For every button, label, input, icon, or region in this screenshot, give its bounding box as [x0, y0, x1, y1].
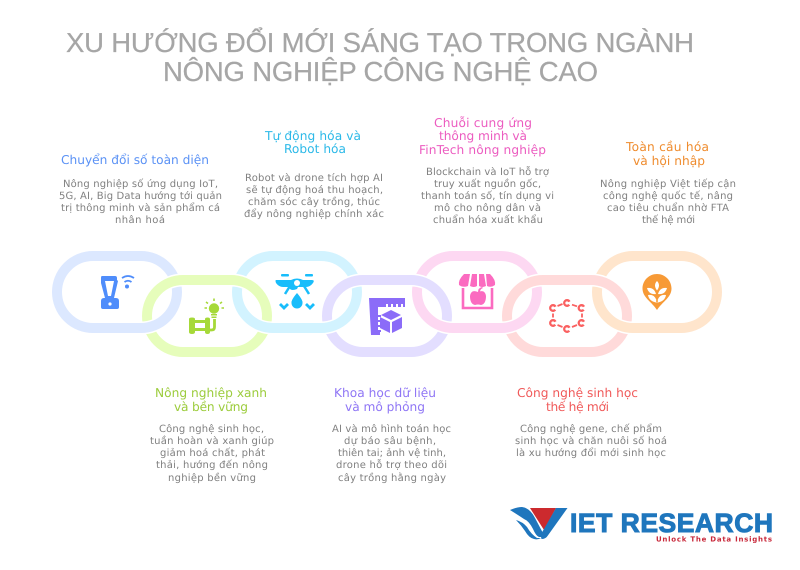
text block: green and sustainable: và bền vững	[174, 400, 248, 414]
text block: smart supply chain and fintech: truy xuất nguồn gốc,	[434, 178, 541, 190]
text block: smart supply chain and fintech: thông minh và	[439, 129, 527, 143]
icon: data cube on ruler	[369, 298, 405, 335]
link 5 pink	[417, 256, 537, 328]
link 1 blue	[57, 256, 177, 328]
icon: plant location pin	[642, 274, 672, 310]
icon: carbon molecule ring	[550, 300, 584, 332]
text block: automation and robotics	[244, 129, 384, 220]
text block: digital transformation	[59, 153, 222, 226]
logo: Viet Research	[510, 507, 773, 544]
text block: next generation biotechnology: là xu hướng đổi mới sinh học	[516, 447, 666, 459]
text block: data science and simulation	[332, 386, 451, 484]
text block: data science and simulation: dự báo sâu bệnh,	[344, 436, 436, 447]
text block: automation and robotics: Robot hóa	[284, 142, 346, 156]
text block: globalisation and integration: Toàn cầu hóa	[625, 140, 709, 154]
text block: globalisation and integration: công nghệ quốc tế, nâng	[603, 190, 733, 202]
text block: globalisation and integration: và hội nhập	[633, 154, 705, 168]
link 6 coral	[507, 280, 627, 352]
text block: smart supply chain and fintech: mô cho nông dân và	[434, 203, 541, 214]
text block: globalisation and integration	[600, 140, 736, 226]
text block: green and sustainable: thải, hướng đến nông	[156, 459, 268, 471]
text block: digital transformation: nhân hoá	[115, 215, 165, 226]
text block: automation and robotics: chăm sóc cây trồng, thúc	[248, 196, 380, 208]
logo: Viet Research: Unlock The Data Insights	[656, 536, 772, 544]
link 4 purple	[327, 280, 447, 352]
text block: digital transformation: 5G, AI, Big Data hướng tới quản	[59, 190, 222, 202]
text block: green and sustainable: giảm hoá chất, phát	[160, 447, 265, 459]
text block: smart supply chain and fintech: Chuỗi cung ứng	[434, 116, 532, 130]
link 2 green	[147, 280, 267, 352]
text block: data science and simulation: thiên tai; ảnh vệ tinh,	[338, 447, 446, 459]
title: XU HƯỚNG ĐỔI MỚI SÁNG TẠO TRONG NGÀNH	[66, 27, 694, 58]
text block: automation and robotics: Robot và drone tích hợp AI	[245, 173, 383, 184]
text block: automation and robotics: Tự động hóa và	[264, 129, 361, 143]
chain of seven interlocking links	[57, 256, 717, 352]
text block: smart supply chain and fintech: Blockchain và IoT hỗ trợ	[426, 166, 550, 178]
icon: agricultural drone spraying	[276, 274, 314, 308]
text block: data science and simulation: Khoa học dữ liệu	[334, 386, 436, 400]
text block: next generation biotechnology: sinh học và chăn nuôi số hoá	[515, 435, 667, 447]
title: NÔNG NGHIỆP CÔNG NGHỆ CAO	[163, 56, 598, 87]
text block: green and sustainable	[150, 386, 274, 484]
text block: next generation biotechnology: Công nghệ gene, chế phẩm	[520, 423, 662, 435]
logo: Viet Research: IET RESEARCH	[570, 508, 773, 538]
text block: green and sustainable: tuần hoàn và xanh giúp	[150, 435, 274, 447]
text block: smart supply chain and fintech: FinTech nông nghiệp	[419, 143, 546, 157]
icon: smart blender with wifi	[101, 276, 134, 309]
link 3 cyan	[237, 256, 357, 328]
text block: smart supply chain and fintech: thanh toán số, tín dụng vi	[421, 190, 554, 202]
text block: next generation biotechnology	[515, 386, 667, 459]
text block: automation and robotics: sẽ tự động hoá thu hoạch,	[246, 185, 383, 196]
icon: fruit shop storefront	[459, 274, 495, 308]
text block: data science and simulation: và mô phỏng	[345, 400, 425, 414]
text block: digital transformation: Nông nghiệp số ứng dụng IoT,	[63, 178, 218, 190]
text block: globalisation and integration: cao tiêu chuẩn nhờ FTA	[607, 202, 729, 214]
text block: smart supply chain and fintech: chuẩn hóa xuất khẩu	[433, 214, 543, 226]
icon: irrigation pipe with light bulb	[189, 298, 224, 334]
text block: data science and simulation: cây trồng hằng ngày	[338, 472, 446, 484]
link 7 orange	[597, 256, 717, 328]
text block: data science and simulation: drone hỗ trợ theo dõi	[336, 459, 447, 471]
text block: globalisation and integration: thế hệ mới	[642, 214, 695, 226]
text block: data science and simulation: AI và mô hình toán học	[332, 424, 451, 435]
text block: next generation biotechnology: Công nghệ sinh học	[517, 386, 638, 400]
text block: green and sustainable: nghiệp bền vững	[168, 472, 256, 484]
text block: automation and robotics: đẩy nông nghiệp chính xác	[244, 208, 384, 220]
text block: green and sustainable: Nông nghiệp xanh	[155, 386, 267, 400]
text block: green and sustainable: Công nghệ sinh học,	[159, 424, 264, 435]
text block: digital transformation: Chuyển đổi số toàn diện	[61, 153, 209, 167]
text block: next generation biotechnology: thế hệ mới	[546, 400, 609, 414]
title	[66, 27, 694, 87]
text block: smart supply chain and fintech	[419, 116, 554, 226]
text block: digital transformation: trị thông minh và sản phẩm cá	[61, 202, 220, 214]
text block: globalisation and integration: Nông nghiệp Việt tiếp cận	[600, 178, 736, 190]
